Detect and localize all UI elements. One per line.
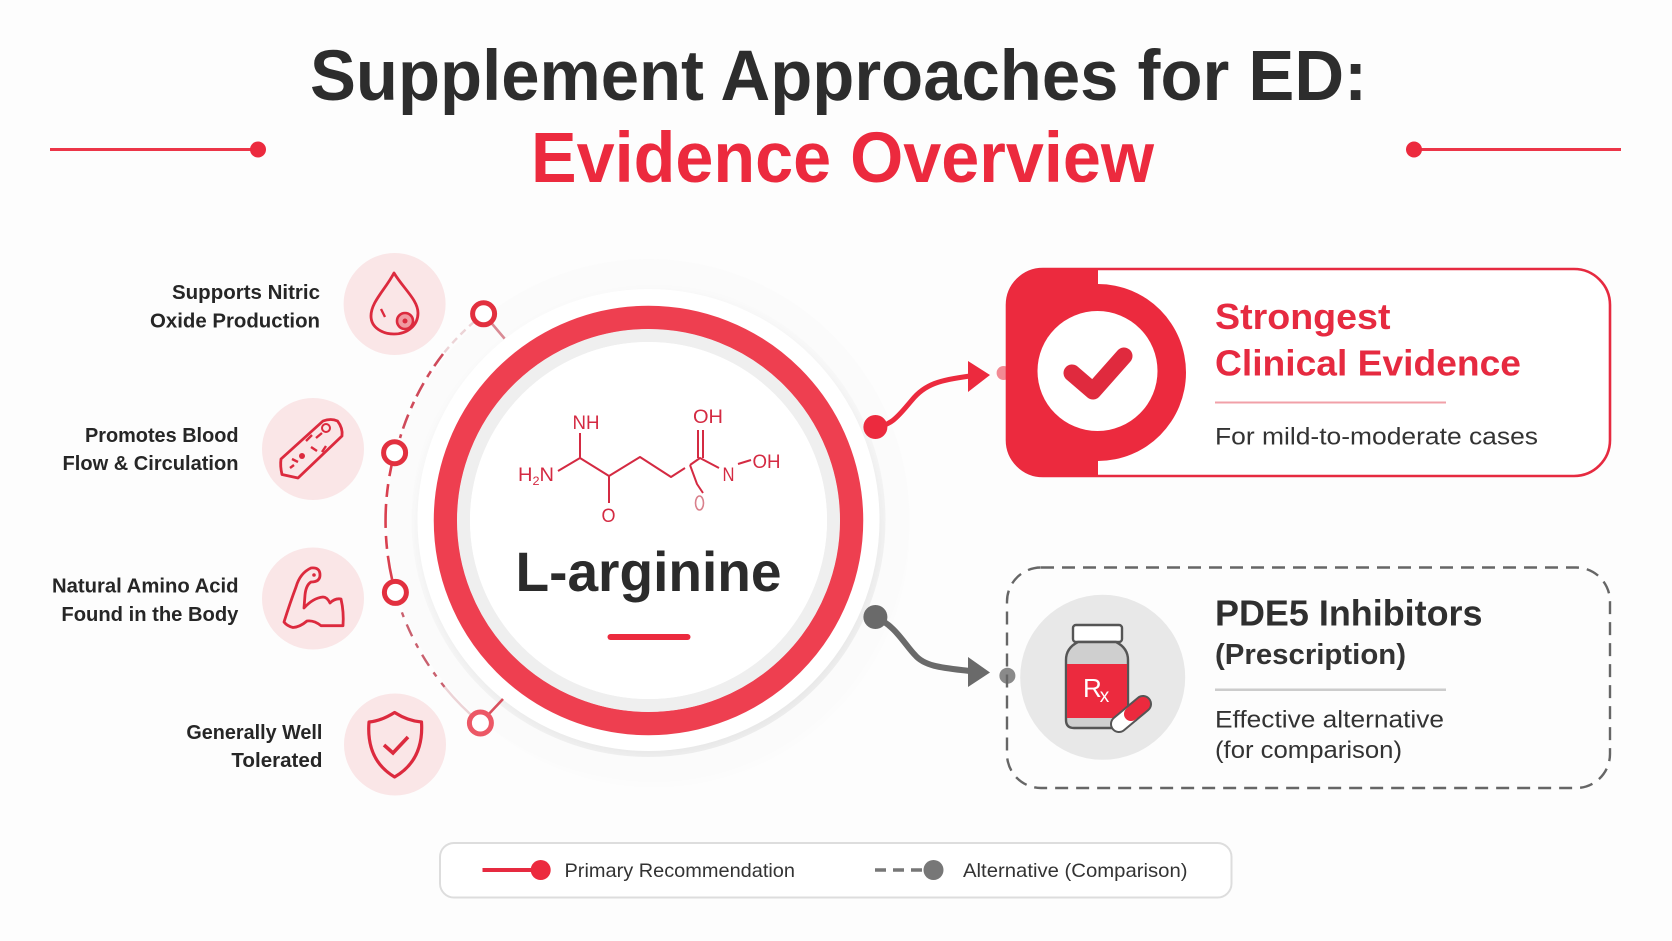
molecule diagram: H bbox=[518, 465, 532, 486]
label: Generally Well bbox=[186, 721, 322, 744]
label underline bbox=[608, 634, 690, 640]
legend: primary recommendation: Primary Recommendation bbox=[564, 860, 795, 882]
benefit: well tolerated bbox=[186, 694, 446, 796]
label: Tolerated bbox=[231, 749, 322, 772]
legend: alternative bbox=[875, 860, 1188, 882]
icon: prescription bottle: R bbox=[1083, 673, 1102, 703]
molecule diagram: N bbox=[540, 465, 554, 486]
label: Found in the Body bbox=[61, 603, 239, 626]
molecule diagram bbox=[518, 407, 780, 527]
icon: shield with check bbox=[344, 694, 446, 796]
central L-arginine circle bbox=[400, 271, 898, 769]
L-arginine label: L-arginine bbox=[516, 540, 782, 603]
benefit: natural amino acid bbox=[52, 548, 364, 650]
icon: flexed muscle bbox=[262, 548, 364, 650]
arrow: L-arginine to PDE5 inhibitors bbox=[863, 605, 1015, 687]
label: Flow & Circulation bbox=[62, 452, 238, 475]
label: Natural Amino Acid bbox=[52, 574, 238, 597]
left title ornament bbox=[50, 142, 266, 158]
legend: alternative: Alternative (Comparison) bbox=[963, 860, 1188, 882]
right title ornament bbox=[1406, 142, 1621, 158]
description: (for comparison) bbox=[1215, 737, 1402, 764]
heading: PDE5 Inhibitors bbox=[1215, 593, 1482, 634]
icon: prescription bottle bbox=[1020, 595, 1185, 760]
arrow: L-arginine to strongest evidence bbox=[863, 361, 1011, 439]
dashed connector arc with nodes bbox=[384, 303, 505, 734]
benefit: nitric oxide bbox=[150, 253, 446, 355]
description: Effective alternative bbox=[1215, 706, 1444, 734]
subheading: (Prescription) bbox=[1215, 639, 1406, 671]
title bbox=[310, 37, 1367, 198]
label: Promotes Blood bbox=[85, 424, 238, 447]
title: Evidence Overview bbox=[531, 119, 1155, 198]
icon: blood vessel bbox=[262, 398, 364, 500]
molecule diagram: N bbox=[722, 465, 734, 486]
heading: Strongest bbox=[1215, 296, 1391, 337]
legend bbox=[440, 843, 1232, 898]
panel: strongest clinical evidence bbox=[1006, 268, 1610, 477]
molecule diagram: OH bbox=[693, 407, 723, 428]
molecule diagram: O bbox=[602, 506, 616, 527]
heading: Clinical Evidence bbox=[1215, 343, 1521, 384]
icon: check badge bbox=[1006, 268, 1186, 477]
title: Supplement Approaches for ED: bbox=[310, 37, 1367, 116]
panel: PDE5 inhibitors bbox=[1007, 568, 1610, 788]
benefit: blood flow bbox=[62, 398, 364, 500]
label: Supports Nitric bbox=[172, 281, 320, 304]
molecule diagram: OH bbox=[752, 452, 780, 473]
icon: prescription bottle: x bbox=[1100, 686, 1110, 707]
molecule diagram: NH bbox=[572, 413, 600, 434]
label: Oxide Production bbox=[150, 310, 320, 332]
icon: blood drop bbox=[344, 253, 446, 355]
description: For mild-to-moderate cases bbox=[1215, 424, 1538, 451]
molecule diagram: 2 bbox=[532, 474, 540, 488]
